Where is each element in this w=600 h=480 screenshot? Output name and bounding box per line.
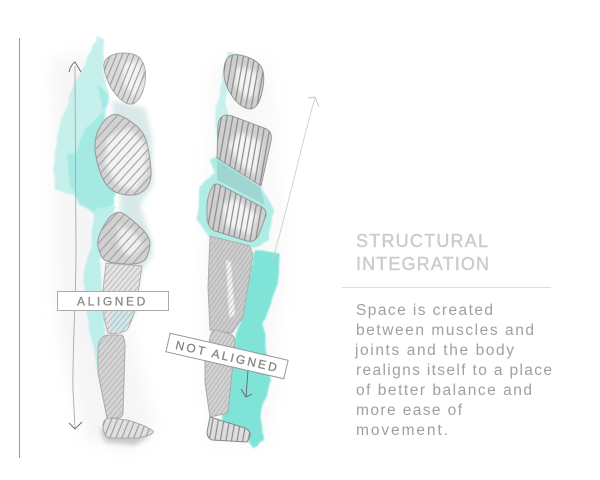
body text: Space is created [356, 302, 493, 319]
label: not aligned: NOT ALIGNED [174, 338, 280, 375]
body text: of better balance and [356, 382, 532, 399]
hip [98, 212, 150, 264]
foot [103, 418, 153, 438]
body text: realigns itself to a place [356, 362, 552, 379]
vertical rule [18, 38, 20, 458]
teal wash: middle [197, 156, 274, 248]
figure: not aligned body [197, 52, 319, 449]
double arrow [69, 62, 82, 429]
body text: joints and the body [354, 342, 514, 359]
teal wash: leg [222, 250, 279, 449]
hip [207, 184, 266, 241]
foot [207, 417, 250, 442]
paper shadow [200, 60, 285, 445]
teal wash: right edge [112, 100, 153, 330]
torso [95, 114, 151, 195]
heading divider [342, 286, 551, 288]
teal wash: light [53, 36, 112, 222]
paper shadow [52, 50, 155, 450]
teal wash: lower [84, 205, 115, 375]
body text: more ease of [356, 402, 463, 419]
heading [356, 231, 489, 274]
torso [217, 115, 271, 186]
body text: between muscles and [356, 322, 534, 339]
foot shadow [100, 428, 150, 445]
heading: INTEGRATION [356, 254, 489, 274]
figure: aligned body [52, 36, 155, 450]
thigh [208, 236, 253, 333]
head [104, 53, 146, 104]
head [224, 55, 264, 109]
lower leg [205, 330, 235, 417]
lower leg [98, 335, 125, 418]
thigh [103, 263, 142, 334]
label: aligned: ALIGNED [77, 294, 148, 308]
body text: movement. [356, 422, 448, 439]
teal wash: upper [215, 52, 238, 145]
heading: STRUCTURAL [356, 231, 488, 251]
diagonal arrow [241, 97, 319, 397]
body text [354, 302, 552, 439]
label: aligned [58, 292, 168, 310]
teal wash: dark band [217, 160, 265, 205]
teal wash: strong [67, 84, 118, 212]
